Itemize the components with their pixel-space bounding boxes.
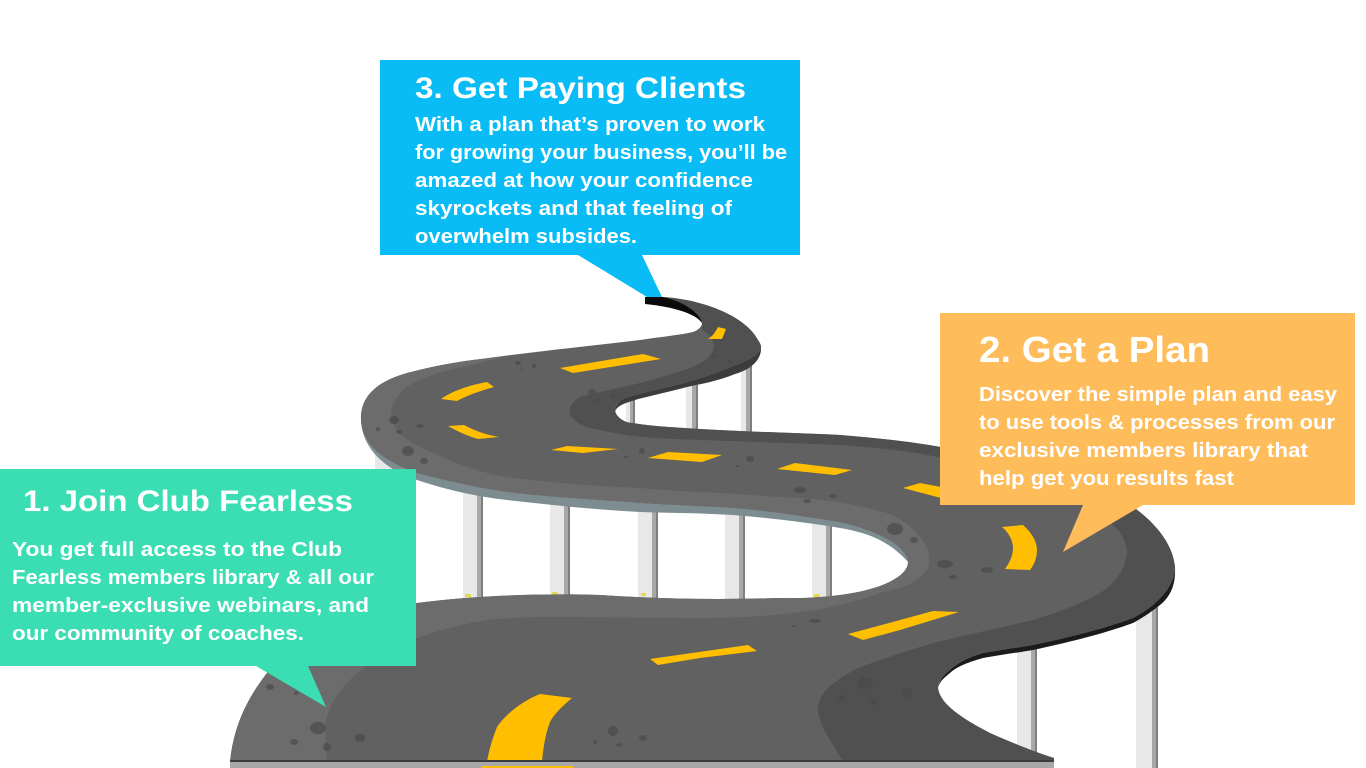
left road shoulder xyxy=(230,356,929,762)
callout: step 3 get paying clients xyxy=(380,60,800,297)
step 3 body text: skyrockets and that feeling of xyxy=(415,198,732,220)
step 1 body text: member-exclusive webinars, and xyxy=(12,595,369,617)
step 3 body text: for growing your business, you’ll be xyxy=(415,142,787,164)
step 2 body text: exclusive members library that xyxy=(979,440,1308,462)
step 2 body text xyxy=(979,384,1338,490)
step 1 body text xyxy=(12,539,374,645)
road support pillars xyxy=(375,355,1158,768)
yellow lane dashes xyxy=(441,327,1037,762)
road underside rim xyxy=(361,347,1175,690)
step 3 body text xyxy=(415,114,787,248)
step 3 heading: 3. Get Paying Clients xyxy=(415,72,746,105)
pothole speckles xyxy=(266,355,993,751)
callout: step 2 get a plan xyxy=(940,313,1355,552)
step 3 body text: overwhelm subsides. xyxy=(415,226,637,248)
step 1 heading: 1. Join Club Fearless xyxy=(23,485,353,518)
step 1 body text: Fearless members library & all our xyxy=(12,567,374,589)
step 3 body text: amazed at how your confidence xyxy=(415,170,753,192)
road top edge lip xyxy=(645,297,702,323)
step 1 body text: our community of coaches. xyxy=(12,623,304,645)
road base edge xyxy=(230,760,1054,768)
road surface xyxy=(230,297,1175,762)
step 2 body text: help get you results fast xyxy=(979,468,1234,490)
right road shoulder xyxy=(569,297,1175,761)
step 1 body text: You get full access to the Club xyxy=(12,539,342,561)
step 2 body text: to use tools & processes from our xyxy=(979,412,1335,434)
step 3 body text: With a plan that’s proven to work xyxy=(415,114,766,136)
step 2 heading: 2. Get a Plan xyxy=(979,329,1210,370)
step 2 body text: Discover the simple plan and easy xyxy=(979,384,1338,406)
callout: step 1 join club fearless xyxy=(0,469,416,707)
